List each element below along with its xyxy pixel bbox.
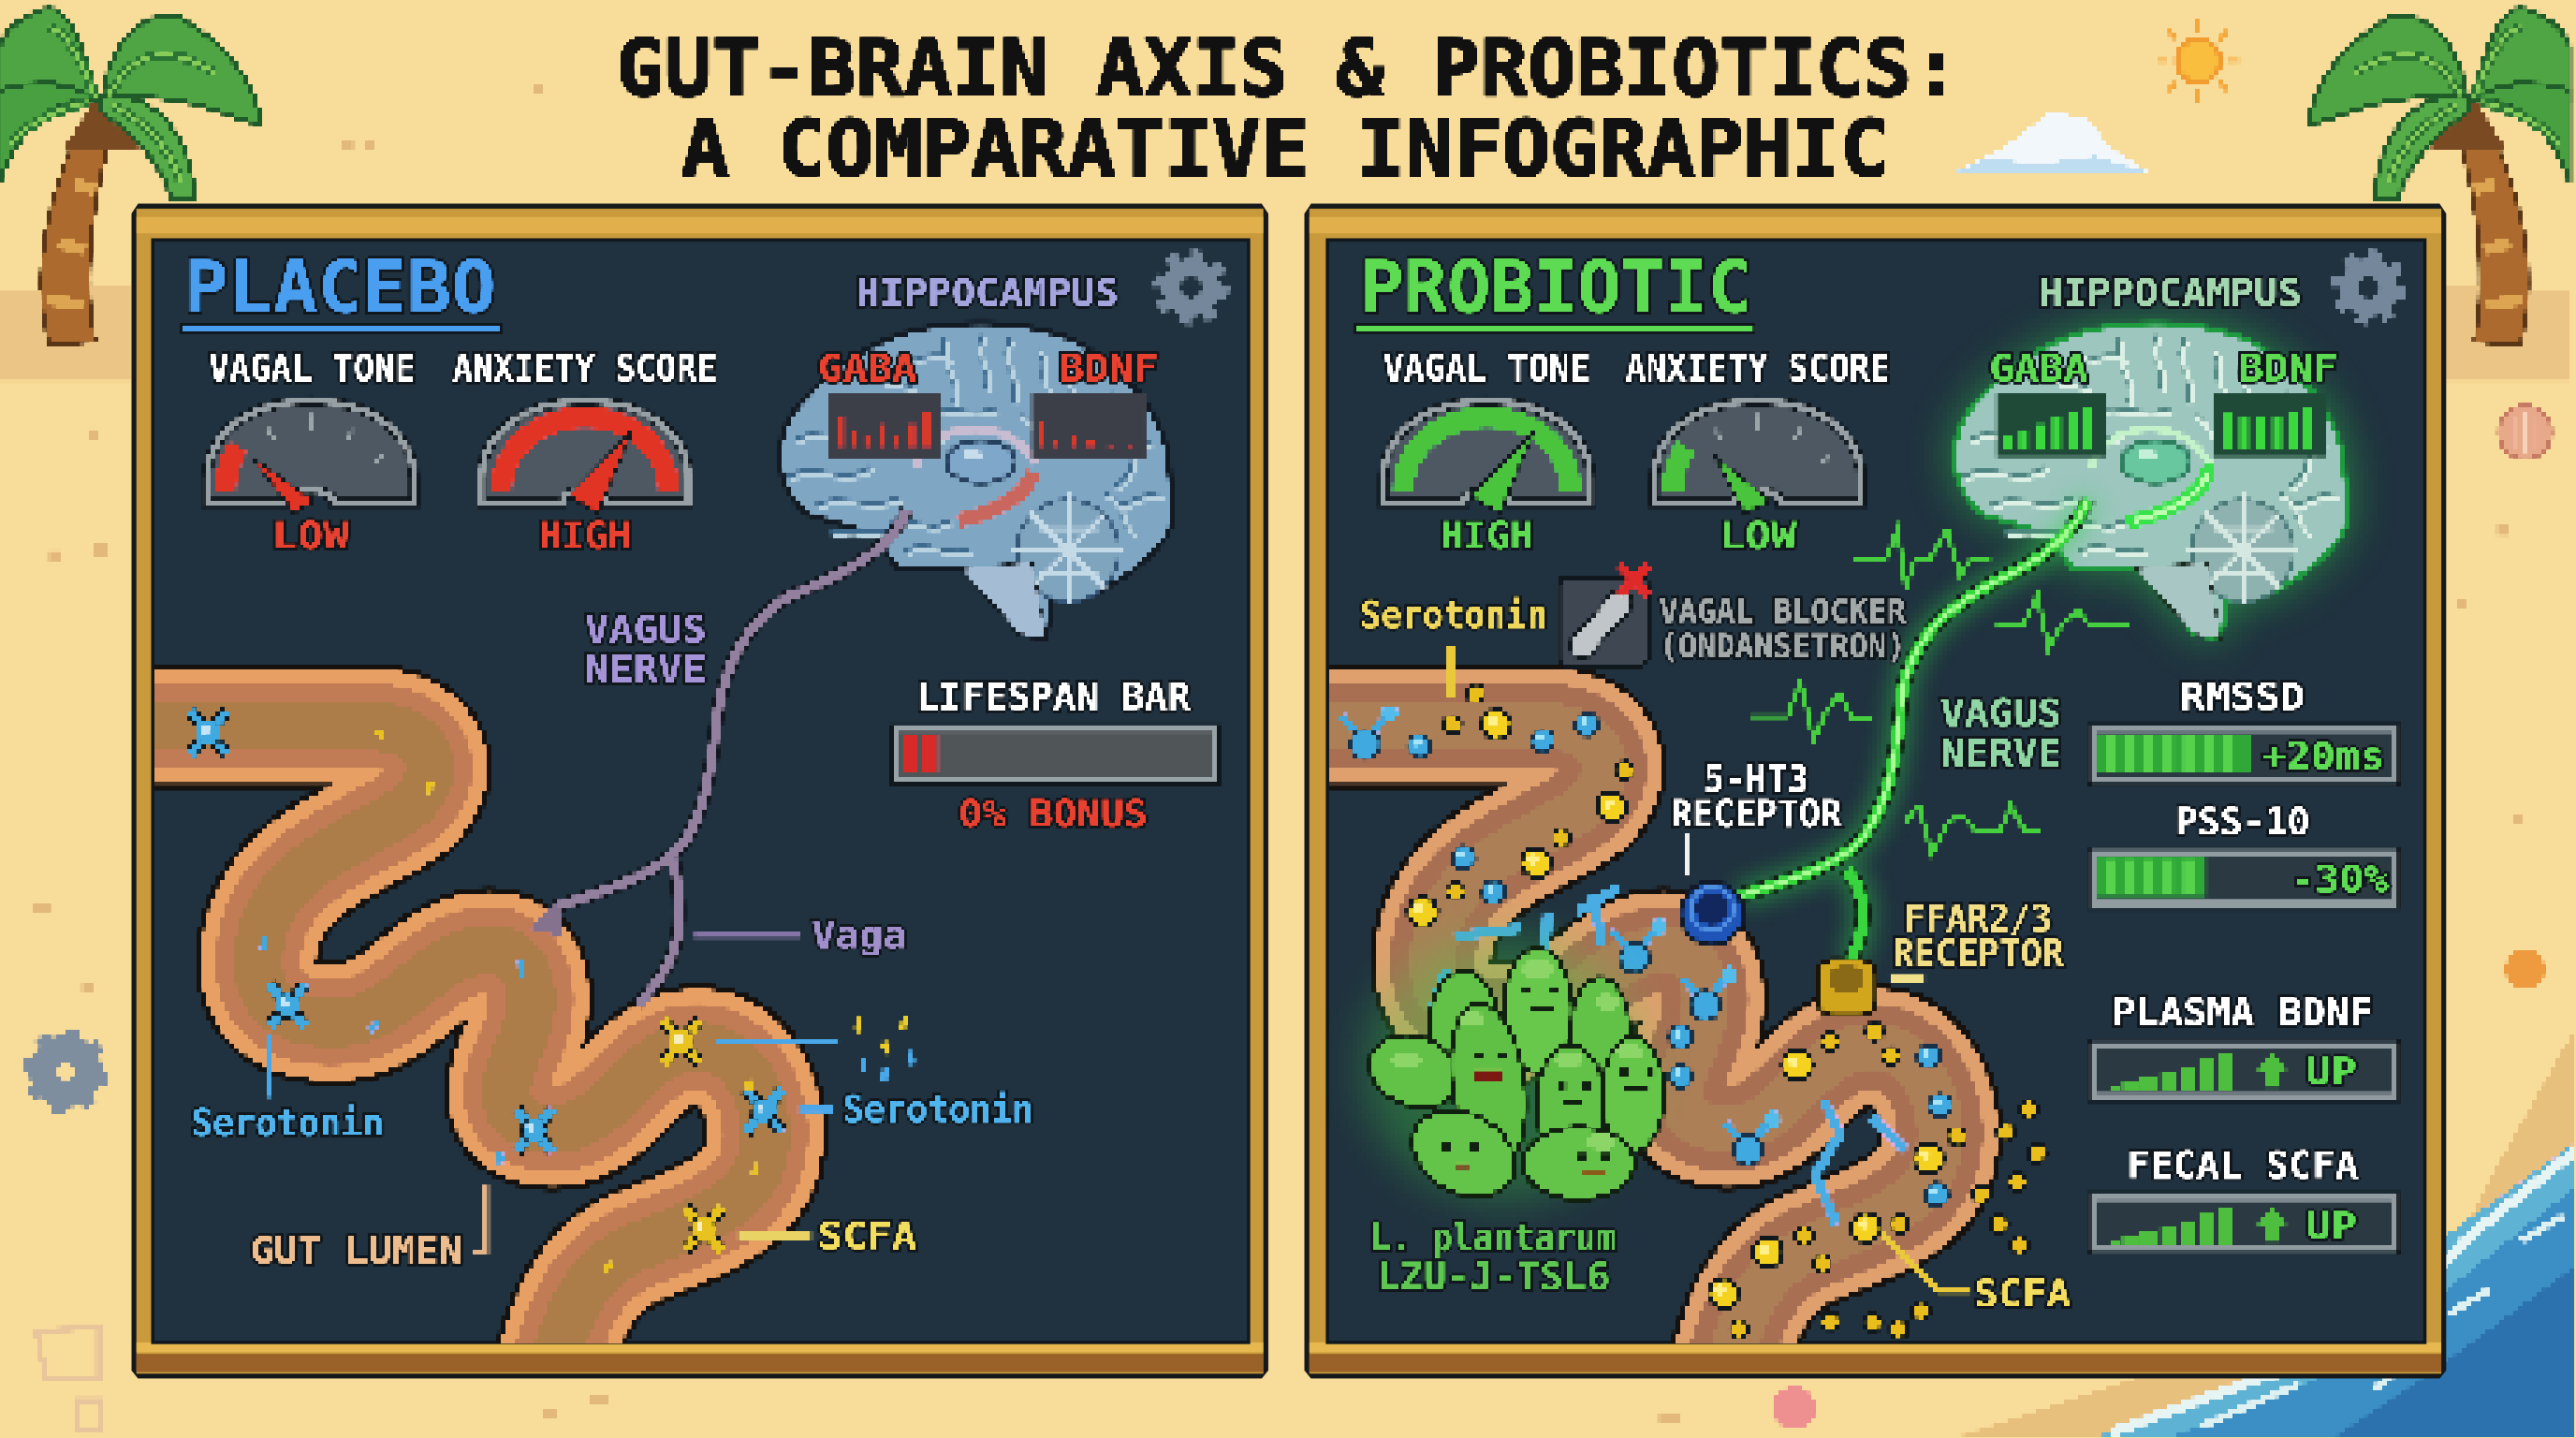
gauge: anxiety score [1654,401,1862,513]
placebo labels: LIFESPAN BAR [915,675,1191,719]
icon: pink starfish [1773,1387,1815,1430]
probiotic labels: PLASMA BDNF [2112,990,2373,1034]
panel frame [1305,204,2446,1379]
icon: orange shell [2506,949,2545,990]
probiotic labels: BDNF [2239,346,2338,390]
probiotic labels: -30% [2291,858,2390,902]
placebo labels: VAGUS [585,608,707,652]
probiotic labels: FFAR2/3 [1904,897,2052,941]
panel: probiotic [1273,204,2446,1380]
heading: probiotic: PROBIOTIC [1360,245,1751,330]
probiotic labels: Serotonin [1360,593,1547,637]
probiotic labels: HIPPOCAMPUS [2039,271,2302,315]
probiotic labels: UP [2305,1049,2357,1093]
gauge: vagal tone [1383,401,1590,513]
vagus nerve glow [1740,500,2088,962]
placebo labels: BDNF [1060,346,1158,390]
placebo labels: GUT LUMEN [251,1229,462,1273]
placebo labels: HIGH [539,514,631,558]
gear icon [2336,255,2402,320]
placebo labels: GABA [818,346,916,390]
probiotic labels: RECEPTOR [1893,932,2064,976]
probiotic labels: NERVE [1940,731,2062,775]
vagus nerve [529,509,907,1005]
probiotic labels: LOW [1720,514,1797,558]
molecules in gut [191,712,782,1271]
ECG traces [1749,529,2130,855]
probiotic labels: PSS-10 [2175,800,2310,844]
placebo labels: ANXIETY SCORE [453,346,717,390]
icon: pink shell [2499,406,2552,459]
probiotic labels: RECEPTOR [1671,792,1842,836]
icon: right palm tree [2308,8,2569,381]
probiotic labels: (ONDANSETRON) [1660,627,1906,666]
5-HT3 receptor [1680,882,1743,945]
probiotic labels: HIGH [1441,514,1533,558]
molecules in gut [1342,684,2046,1339]
probiotic labels: 5-HT3 [1704,757,1808,801]
pill: vagal blocker [1559,565,1647,666]
probiotic labels: UP [2305,1204,2357,1248]
icon: cloud [1955,111,2149,172]
probiotic labels: L. plantarum [1370,1216,1617,1260]
placebo labels: Vaga [812,914,907,958]
probiotic labels [1360,271,2390,1315]
sparkles [856,1016,907,1055]
gut illustration [1273,726,1940,1380]
placebo labels: 0% BONUS [959,792,1148,836]
gauge: anxiety score [481,401,688,513]
probiotic labels: GABA [1989,346,2088,390]
lifespan bar [892,726,1218,784]
title [616,22,1960,195]
probiotic labels: RMSSD [2180,675,2305,719]
brain: glowing hippocampus [1954,323,2347,639]
icon: sand gear [28,1034,104,1109]
placebo labels [191,271,1191,1273]
callout leader lines [1451,644,1969,1292]
sea and wet sand [1955,1027,2576,1438]
icon: left palm tree [0,8,261,381]
probiotic labels: VAGAL TONE [1383,346,1590,390]
probiotic labels: LZU-J-TSL6 [1377,1255,1610,1299]
icon: sun [2157,20,2239,102]
placebo labels: Serotonin [191,1101,384,1145]
probiotic labels: VAGUS [1940,692,2062,736]
probiotic labels: SCFA [1974,1271,2071,1315]
placebo labels: Serotonin [842,1088,1033,1132]
title: GUT-BRAIN AXIS & PROBIOTICS: [616,22,1960,114]
bacteria cluster: L. plantarum [1359,936,1664,1213]
placebo labels: SCFA [818,1214,916,1258]
gauge: vagal tone [207,401,414,513]
metric bars [2089,725,2398,1254]
FFAR2/3 receptor [1817,960,1876,1016]
probiotic labels: +20ms [2261,734,2385,778]
placebo labels: LOW [271,514,350,558]
probiotic labels: VAGAL BLOCKER [1660,593,1907,631]
brain: hippocampus [781,323,1172,639]
panel frame [131,204,1268,1379]
title: A COMPARATIVE INFOGRAPHIC [681,103,1888,195]
heading: placebo: PLACEBO [184,245,496,330]
probiotic labels: ANXIETY SCORE [1626,346,1890,390]
panel: placebo [98,204,1268,1380]
placebo labels: HIPPOCAMPUS [856,271,1119,315]
gut illustration [98,726,766,1380]
gear icon [1158,255,1224,320]
callout leader lines [270,935,840,1252]
placebo labels: NERVE [585,647,707,691]
placebo labels: VAGAL TONE [209,346,416,390]
probiotic labels: FECAL SCFA [2127,1143,2358,1187]
